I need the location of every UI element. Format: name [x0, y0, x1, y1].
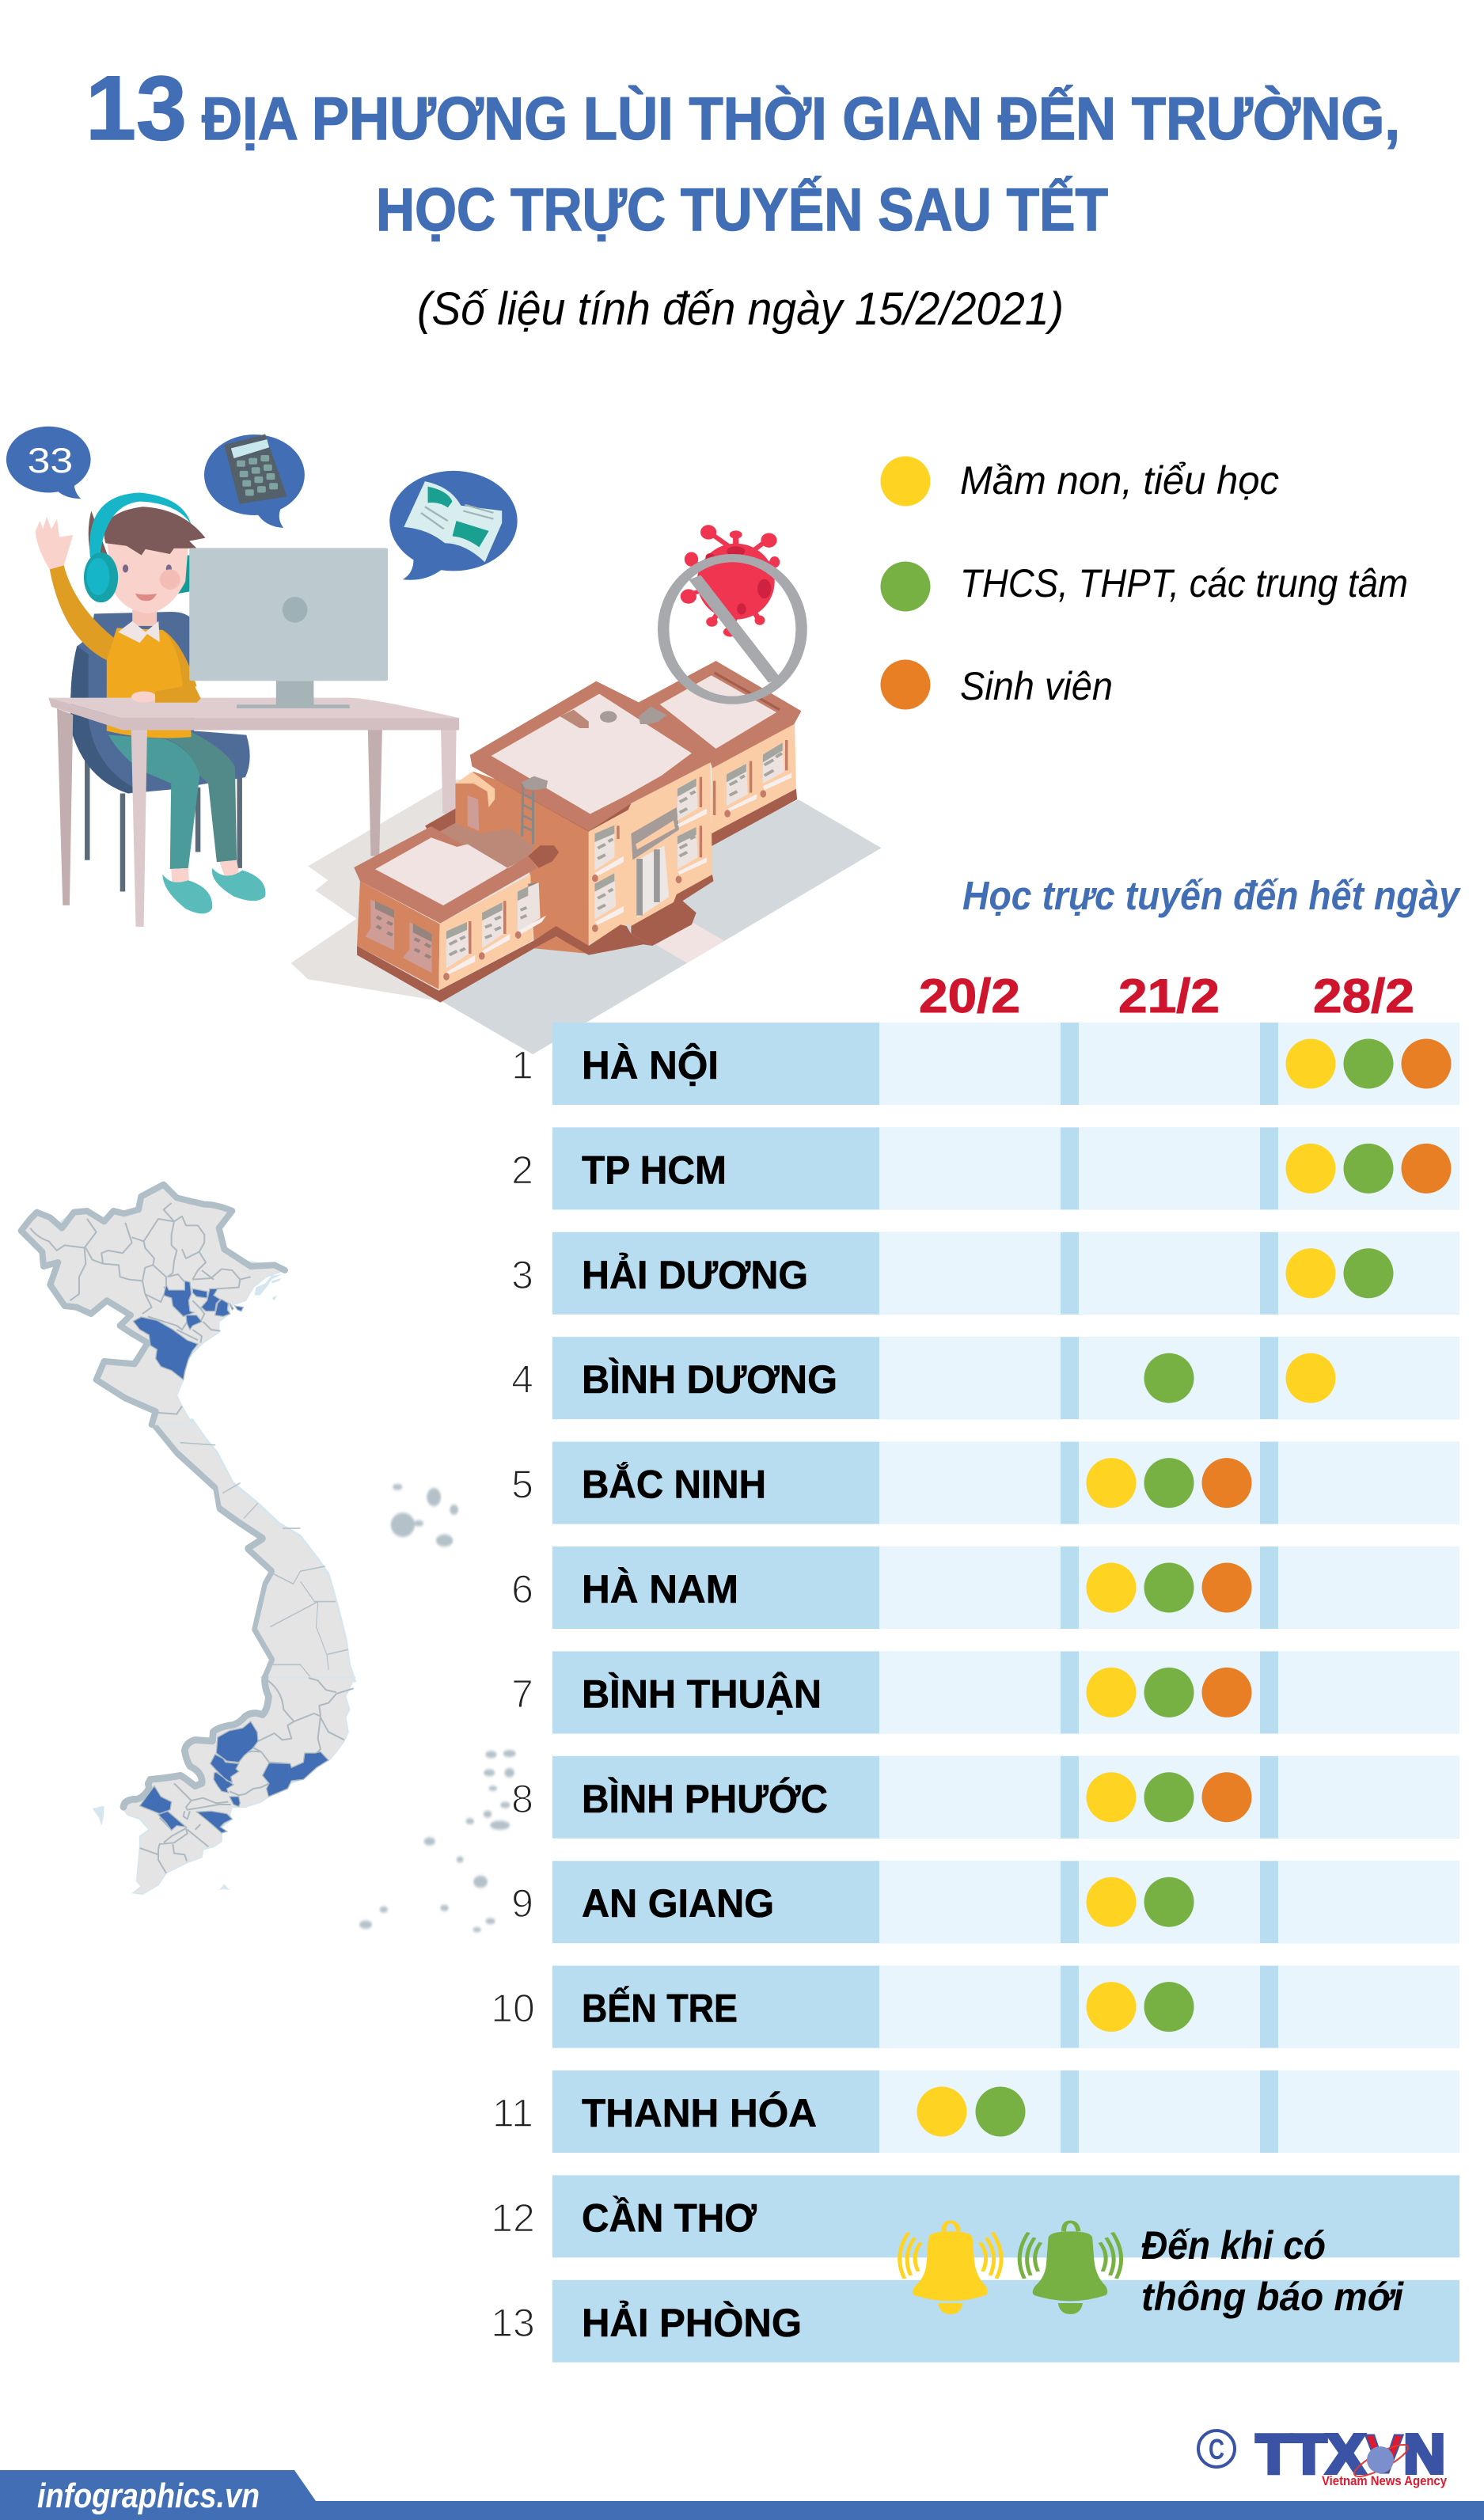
row 11: Thanh Hóa: THANH HÓA [582, 2091, 817, 2135]
row 12: Cần Thơ: 12 [491, 2196, 535, 2240]
row 9: An Giang: 9 [511, 1881, 533, 1926]
illustration: student and school [6, 427, 881, 1054]
row 5: Bắc Ninh: 5 [511, 1463, 533, 1507]
row 12: Cần Thơ [491, 2175, 1459, 2257]
column headers: 21/2 [1118, 970, 1220, 1023]
row 3: Hải Dương: 3 [511, 1253, 533, 1297]
row 8: Bình Phước: BÌNH PHƯỚC [582, 1777, 828, 1821]
row 13: Hải Phòng: HẢI PHÒNG [582, 2301, 802, 2345]
logo: TTXVN [1198, 2423, 1447, 2488]
speech bubble: calculator [204, 434, 305, 528]
computer monitor [189, 548, 388, 708]
row 2: TP HCM: TP HCM [582, 1148, 727, 1192]
speech bubble: 33: 33 [28, 440, 73, 480]
footer band: infographics.vn [37, 2476, 260, 2515]
central region [152, 1412, 355, 1681]
row 7: Bình Thuận [511, 1651, 1459, 1733]
speech bubble: 33 [6, 427, 91, 499]
title: 13 [85, 58, 187, 159]
row 7: Bình Thuận: BÌNH THUẬN [582, 1672, 822, 1716]
row 9: An Giang [511, 1861, 1459, 1943]
row 6: Hà Nam: 6 [511, 1567, 533, 1611]
table of localities [491, 1023, 1459, 2362]
row 6: Hà Nam: HÀ NAM [582, 1567, 738, 1611]
student forearm on desk [131, 685, 201, 703]
southern region [93, 1677, 355, 1894]
row 1: Hà Nội [511, 1023, 1459, 1105]
title: HỌC TRỰC TUYẾN SAU TẾT [376, 176, 1108, 244]
row 1: Hà Nội: HÀ NỘI [582, 1042, 719, 1087]
footer band [0, 2470, 1484, 2520]
title: ĐỊA PHƯƠNG LÙI THỜI GIAN ĐẾN TRƯỜNG, [202, 85, 1400, 153]
row 11: Thanh Hóa: 11 [492, 2091, 533, 2135]
legend [880, 456, 1408, 709]
copyright mark: C [1209, 2433, 1224, 2465]
row 13: Hải Phòng: 13 [491, 2301, 535, 2345]
desk [48, 698, 459, 927]
row 10: Bến Tre: 10 [491, 1987, 535, 2031]
row 7: Bình Thuận: 7 [511, 1672, 533, 1716]
icon: yellow bell [900, 2222, 1001, 2314]
icon: virus with prohibition sign [663, 525, 802, 700]
school building [354, 661, 801, 1003]
column headers: 20/2 [919, 970, 1020, 1023]
row 9: An Giang: AN GIANG [582, 1881, 774, 1926]
row 5: Bắc Ninh [511, 1442, 1459, 1524]
legend item: secondary and centers [880, 561, 1408, 611]
row 1: Hà Nội: 1 [511, 1043, 533, 1087]
callout text: thông báo mới [1141, 2275, 1404, 2319]
student [36, 492, 265, 913]
row 13: Hải Phòng [491, 2280, 1459, 2362]
row 3: Hải Dương [511, 1232, 1459, 1315]
row 10: Bến Tre [491, 1966, 1459, 2048]
agency wordmark: TTXVN [1256, 2423, 1445, 2485]
row 10: Bến Tre: BẾN TRE [582, 1987, 738, 2031]
agency wordmark: Vietnam News Agency [1322, 2473, 1447, 2488]
ground under school [291, 780, 881, 1054]
subtitle: date note: (Số liệu tính đến ngày 15/2/2021) [417, 283, 1064, 335]
icon: green bell [1019, 2222, 1122, 2314]
row 4: Bình Dương: 4 [511, 1357, 533, 1402]
row 8: Bình Phước [511, 1756, 1459, 1839]
legend item: preschool and primary: Mầm non, tiểu học [960, 458, 1279, 503]
offshore islands [359, 1484, 516, 1932]
title [85, 58, 1400, 244]
legend item: students [880, 660, 1113, 709]
row 3: Hải Dương: HẢI DƯƠNG [582, 1253, 808, 1297]
legend item: secondary and centers: THCS, THPT, các trung tâm [960, 561, 1408, 605]
row 2: TP HCM: 2 [511, 1148, 533, 1192]
callout text: Đến khi có [1141, 2223, 1326, 2268]
row 5: Bắc Ninh: BẮC NINH [582, 1463, 766, 1507]
row 4: Bình Dương [511, 1337, 1459, 1419]
row 2: TP HCM [511, 1127, 1459, 1209]
row 12: Cần Thơ: CẦN THƠ [582, 2196, 757, 2240]
row 11: Thanh Hóa [492, 2070, 1459, 2153]
copyright mark [1198, 2431, 1235, 2467]
map of Vietnam [18, 1183, 516, 1932]
column headers: 28/2 [1313, 970, 1414, 1023]
column headers [919, 970, 1414, 1023]
chair [70, 612, 250, 892]
callout text [1141, 2223, 1404, 2319]
speech bubble: book [389, 471, 518, 580]
row 4: Bình Dương: BÌNH DƯƠNG [582, 1357, 837, 1402]
row 8: Bình Phước: 8 [511, 1777, 533, 1821]
callout: until further notice [900, 2222, 1404, 2319]
row 6: Hà Nam [511, 1547, 1459, 1629]
northern region [18, 1183, 285, 1425]
legend item: students: Sinh viên [960, 664, 1113, 708]
